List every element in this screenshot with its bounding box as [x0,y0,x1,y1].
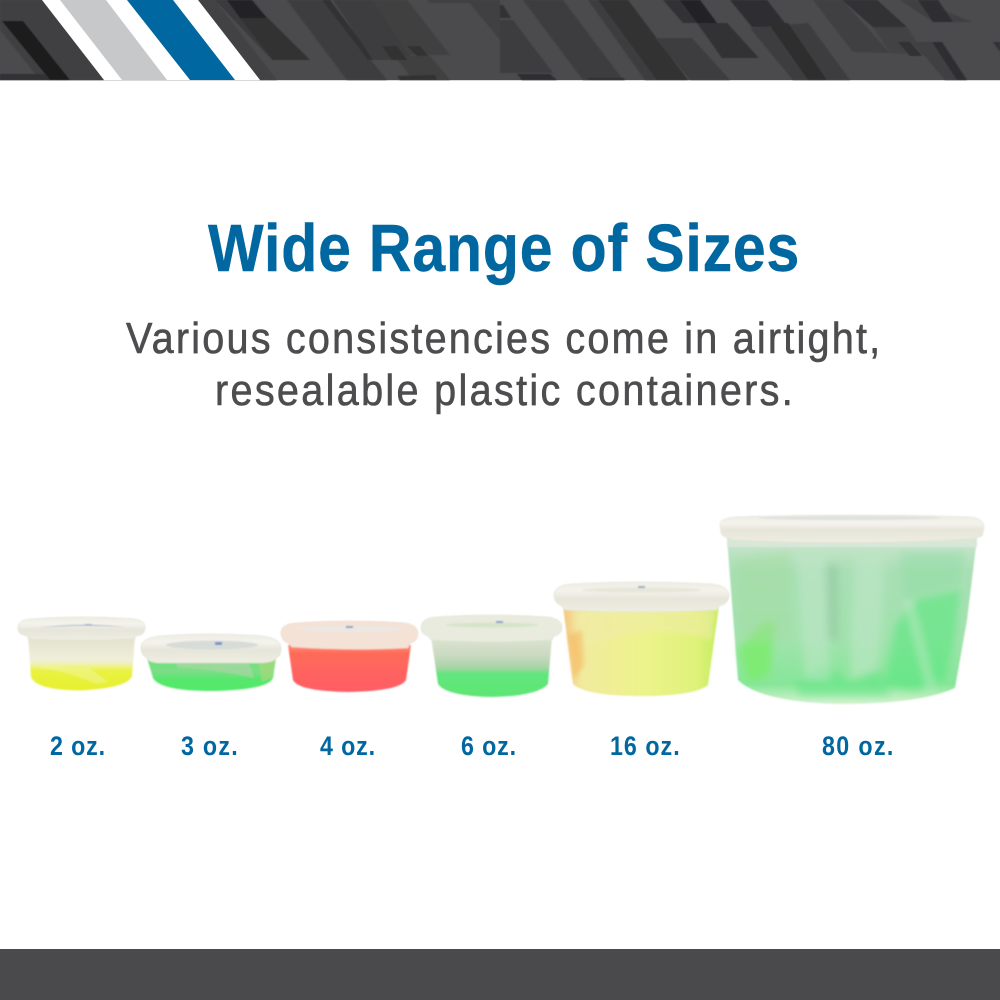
container: 3 oz [141,634,281,691]
lid label [37,624,125,628]
lid label [758,516,942,520]
body [28,636,135,690]
body [431,636,552,697]
title: Wide Range of Sizes [208,212,799,286]
label: 16 oz: 16 oz. [610,731,680,761]
lid [141,634,281,663]
container: 16 oz [554,582,729,696]
label: 2 oz: 2 oz. [50,731,105,761]
label: 80 oz: 80 oz. [822,731,893,761]
blue stripe [127,0,235,80]
lid [554,582,729,612]
lid [18,617,145,640]
container: 6 oz [421,615,562,697]
subtitle line 2: resealable plastic containers. [215,365,793,414]
header banner [0,0,1000,81]
subtitle [126,313,880,414]
body [288,645,411,692]
subtitle line 1: Various consistencies come in airtight, [126,313,880,362]
size labels [50,731,893,761]
lid label [166,640,258,650]
container: 2 oz [18,617,145,690]
body [147,658,276,691]
lid [421,615,562,642]
lid label [298,626,402,632]
footer bar [0,949,1000,1000]
header stripes [42,0,260,80]
body [727,538,977,704]
gray stripe [60,0,167,80]
label: 6 oz: 6 oz. [461,731,516,761]
rim band [727,538,977,547]
label: 3 oz: 3 oz. [181,731,238,761]
gel streaks [735,552,965,696]
lid label [446,622,538,628]
lid [720,515,984,543]
lid label [582,588,702,592]
body [563,606,719,696]
lid [281,621,418,649]
container: 4 oz [281,621,418,692]
white stripe [42,0,260,80]
label: 4 oz: 4 oz. [320,731,375,761]
container: 80 oz [720,515,984,704]
